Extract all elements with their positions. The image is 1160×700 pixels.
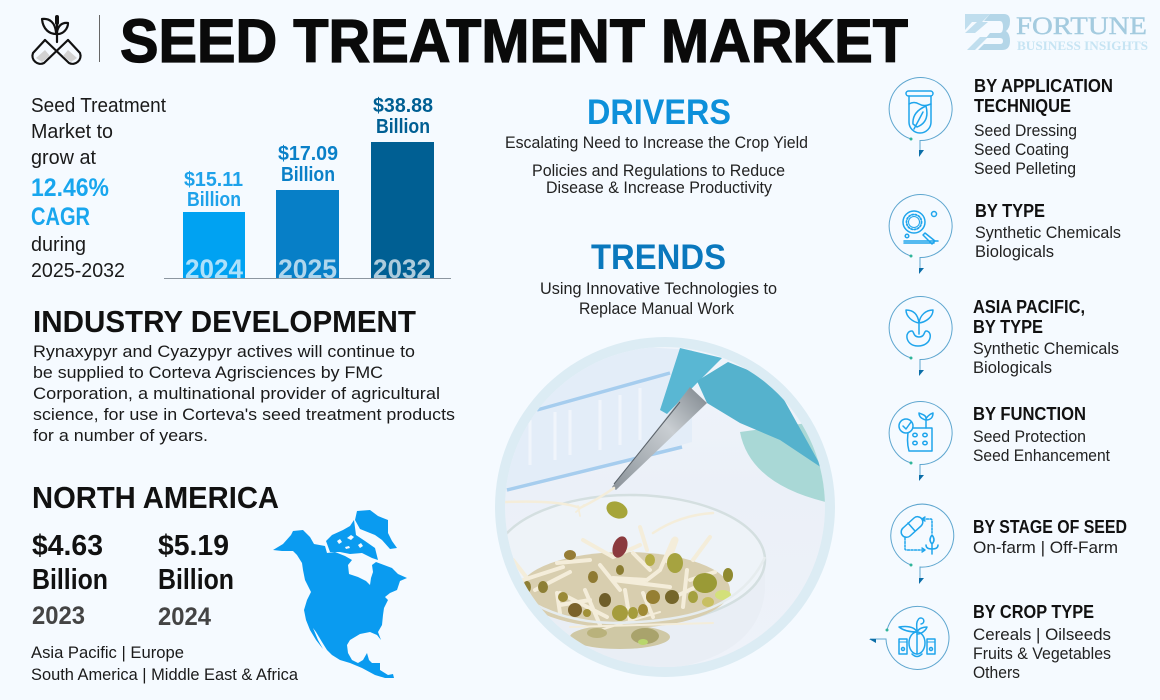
text: driver items: Disease & Increase Productivity bbox=[546, 179, 773, 197]
panel: industry development bbox=[33, 304, 455, 445]
bar 2025 bbox=[276, 143, 339, 284]
text: by crop type: Others bbox=[973, 664, 1020, 682]
text: development paragraph: for a number of years. bbox=[33, 426, 208, 445]
text: market growth statement: CAGR bbox=[31, 203, 90, 231]
text: development paragraph: Rynaxypyr and Cyazypyr actives will continue to bbox=[33, 342, 415, 361]
text: market growth statement: 12.46% bbox=[31, 174, 109, 202]
bar 2024: $15.11 bbox=[184, 169, 243, 191]
text: driver items: Escalating Need to Increase the Crop Yield bbox=[505, 134, 808, 152]
bar 2032: Billion bbox=[376, 116, 430, 138]
panel: CAGR summary bbox=[31, 95, 451, 284]
text: by type: Synthetic Chemicals bbox=[975, 224, 1121, 242]
map: north america bbox=[273, 510, 407, 678]
text: by application technique: Seed Dressing bbox=[974, 122, 1077, 140]
heading: north america: NORTH AMERICA bbox=[32, 480, 279, 515]
heading: trends: TRENDS bbox=[591, 238, 726, 277]
sprouts bbox=[505, 488, 715, 630]
text: by crop type bbox=[973, 601, 1111, 682]
icon: magnifier with microbe bbox=[889, 195, 952, 274]
text: trend items: Replace Manual Work bbox=[579, 300, 735, 318]
icon: seed packet with check bbox=[889, 402, 952, 481]
stat: 2023 value: 2023 bbox=[32, 602, 85, 630]
text: market growth statement: Market to bbox=[31, 121, 113, 143]
panel: trends bbox=[540, 238, 777, 318]
bar 2025: $17.09 bbox=[278, 143, 338, 165]
petri dish bbox=[505, 557, 765, 667]
text: driver items bbox=[505, 134, 808, 197]
stat: 2024 value: $5.19 bbox=[158, 530, 229, 562]
teal dish at back bbox=[740, 424, 825, 502]
text: by application technique: Seed Pelleting bbox=[974, 160, 1076, 178]
stat: 2023 value bbox=[32, 530, 108, 630]
segment: crop type bbox=[869, 601, 1111, 682]
text: asia pacific by type: Synthetic Chemicals bbox=[973, 340, 1119, 358]
stat: 2024 value: Billion bbox=[158, 564, 234, 596]
text: asia pacific by type: Biologicals bbox=[973, 359, 1052, 377]
segment: application technique bbox=[889, 75, 1113, 178]
panel: drivers bbox=[505, 93, 808, 197]
text: by application technique: Seed Coating bbox=[974, 141, 1069, 159]
segment: asia pacific by type bbox=[889, 296, 1119, 377]
text: market growth statement: 2025-2032 bbox=[31, 260, 125, 282]
text: asia pacific by type: ASIA PACIFIC, bbox=[973, 296, 1085, 317]
text: development paragraph: science, for use in Corteva's seed treatment products bbox=[33, 405, 455, 424]
seeds bbox=[523, 498, 733, 645]
bar 2032 bbox=[371, 95, 434, 284]
icon: seedling and capsules logo bbox=[32, 17, 81, 64]
bar 2025: 2025 bbox=[278, 254, 337, 284]
sprout mass shadow bbox=[520, 552, 730, 628]
stat: 2023 value: $4.63 bbox=[32, 530, 103, 562]
stat: 2023 value: Billion bbox=[32, 564, 108, 596]
photo: tweezers lifting sprouted seed over petri dish bbox=[495, 337, 835, 677]
text: asia pacific by type: BY TYPE bbox=[973, 316, 1043, 337]
icon: seed with crops bbox=[869, 606, 949, 669]
text: by stage of seed bbox=[973, 516, 1127, 557]
title: SEED TREATMENT MARKET bbox=[120, 7, 908, 75]
panel: north america bbox=[31, 480, 407, 684]
text: by function: Seed Enhancement bbox=[973, 447, 1110, 465]
bar chart: market size bbox=[164, 95, 451, 284]
bar 2024 bbox=[183, 169, 245, 284]
text: other regions: South America | Middle East & Africa bbox=[31, 666, 299, 684]
glove bbox=[660, 348, 722, 414]
segment: function bbox=[889, 402, 1110, 481]
text: market growth statement: Seed Treatment bbox=[31, 95, 166, 117]
divider bbox=[99, 15, 100, 62]
segment: type bbox=[889, 195, 1121, 274]
text: by crop type: Fruits & Vegetables bbox=[973, 645, 1111, 663]
text: by type: BY TYPE bbox=[975, 200, 1045, 221]
stat: 2024 value: 2024 bbox=[158, 603, 211, 631]
segment: stage of seed bbox=[891, 504, 1127, 584]
heading: drivers: DRIVERS bbox=[587, 93, 731, 132]
text: driver items: Policies and Regulations to Reduce bbox=[532, 162, 785, 180]
icon: capsule to plant cycle bbox=[891, 504, 954, 584]
text: development paragraph: Corporation, a multinational provider of agricultural bbox=[33, 384, 440, 403]
text: market growth statement: grow at bbox=[31, 147, 96, 169]
text: by function: BY FUNCTION bbox=[973, 403, 1086, 424]
tweezers bbox=[612, 387, 707, 490]
bar 2032: 2032 bbox=[373, 254, 431, 284]
text: by crop type: BY CROP TYPE bbox=[973, 601, 1094, 622]
text: other regions bbox=[31, 644, 299, 684]
text: other regions: Asia Pacific | Europe bbox=[31, 644, 184, 662]
text: by stage of seed: On-farm | Off-Farm bbox=[973, 539, 1118, 557]
bar 2024: 2024 bbox=[185, 254, 243, 284]
text: development paragraph: be supplied to Corteva Agrisciences by FMC bbox=[33, 363, 383, 382]
bar 2024: Billion bbox=[187, 189, 241, 211]
text: by type bbox=[975, 200, 1121, 261]
text: development paragraph bbox=[33, 342, 455, 445]
text: by function bbox=[973, 403, 1110, 465]
logo: Fortune Business Insights bbox=[965, 13, 1148, 53]
text: by application technique: TECHNIQUE bbox=[974, 95, 1071, 116]
text: market growth statement bbox=[31, 95, 166, 282]
logo: Fortune Business Insights: BUSINESS INSIGHTS bbox=[1017, 38, 1148, 53]
header bbox=[32, 7, 1148, 75]
bar 2032: $38.88 bbox=[373, 95, 433, 117]
text: by crop type: Cereals | Oilseeds bbox=[973, 626, 1111, 644]
text: market growth statement: during bbox=[31, 234, 86, 256]
stat: 2024 value bbox=[158, 530, 234, 631]
lab rack background bbox=[505, 345, 692, 492]
text: trend items bbox=[540, 280, 777, 318]
text: asia pacific by type bbox=[973, 296, 1119, 377]
icon: test tube with leaf bbox=[889, 78, 952, 157]
text: by stage of seed: BY STAGE OF SEED bbox=[973, 516, 1127, 537]
text: by function: Seed Protection bbox=[973, 428, 1086, 446]
text: trend items: Using Innovative Technologies to bbox=[540, 280, 777, 298]
icon: sprouting bean bbox=[889, 297, 952, 376]
text: by type: Biologicals bbox=[975, 243, 1054, 261]
text: by application technique: BY APPLICATION bbox=[974, 75, 1113, 96]
heading: industry development: INDUSTRY DEVELOPMENT bbox=[33, 304, 416, 339]
bar 2025: Billion bbox=[281, 164, 335, 186]
logo: Fortune Business Insights: FORTUNE bbox=[1016, 13, 1147, 40]
panel: segment list bbox=[869, 75, 1127, 682]
text: by application technique bbox=[974, 75, 1113, 178]
